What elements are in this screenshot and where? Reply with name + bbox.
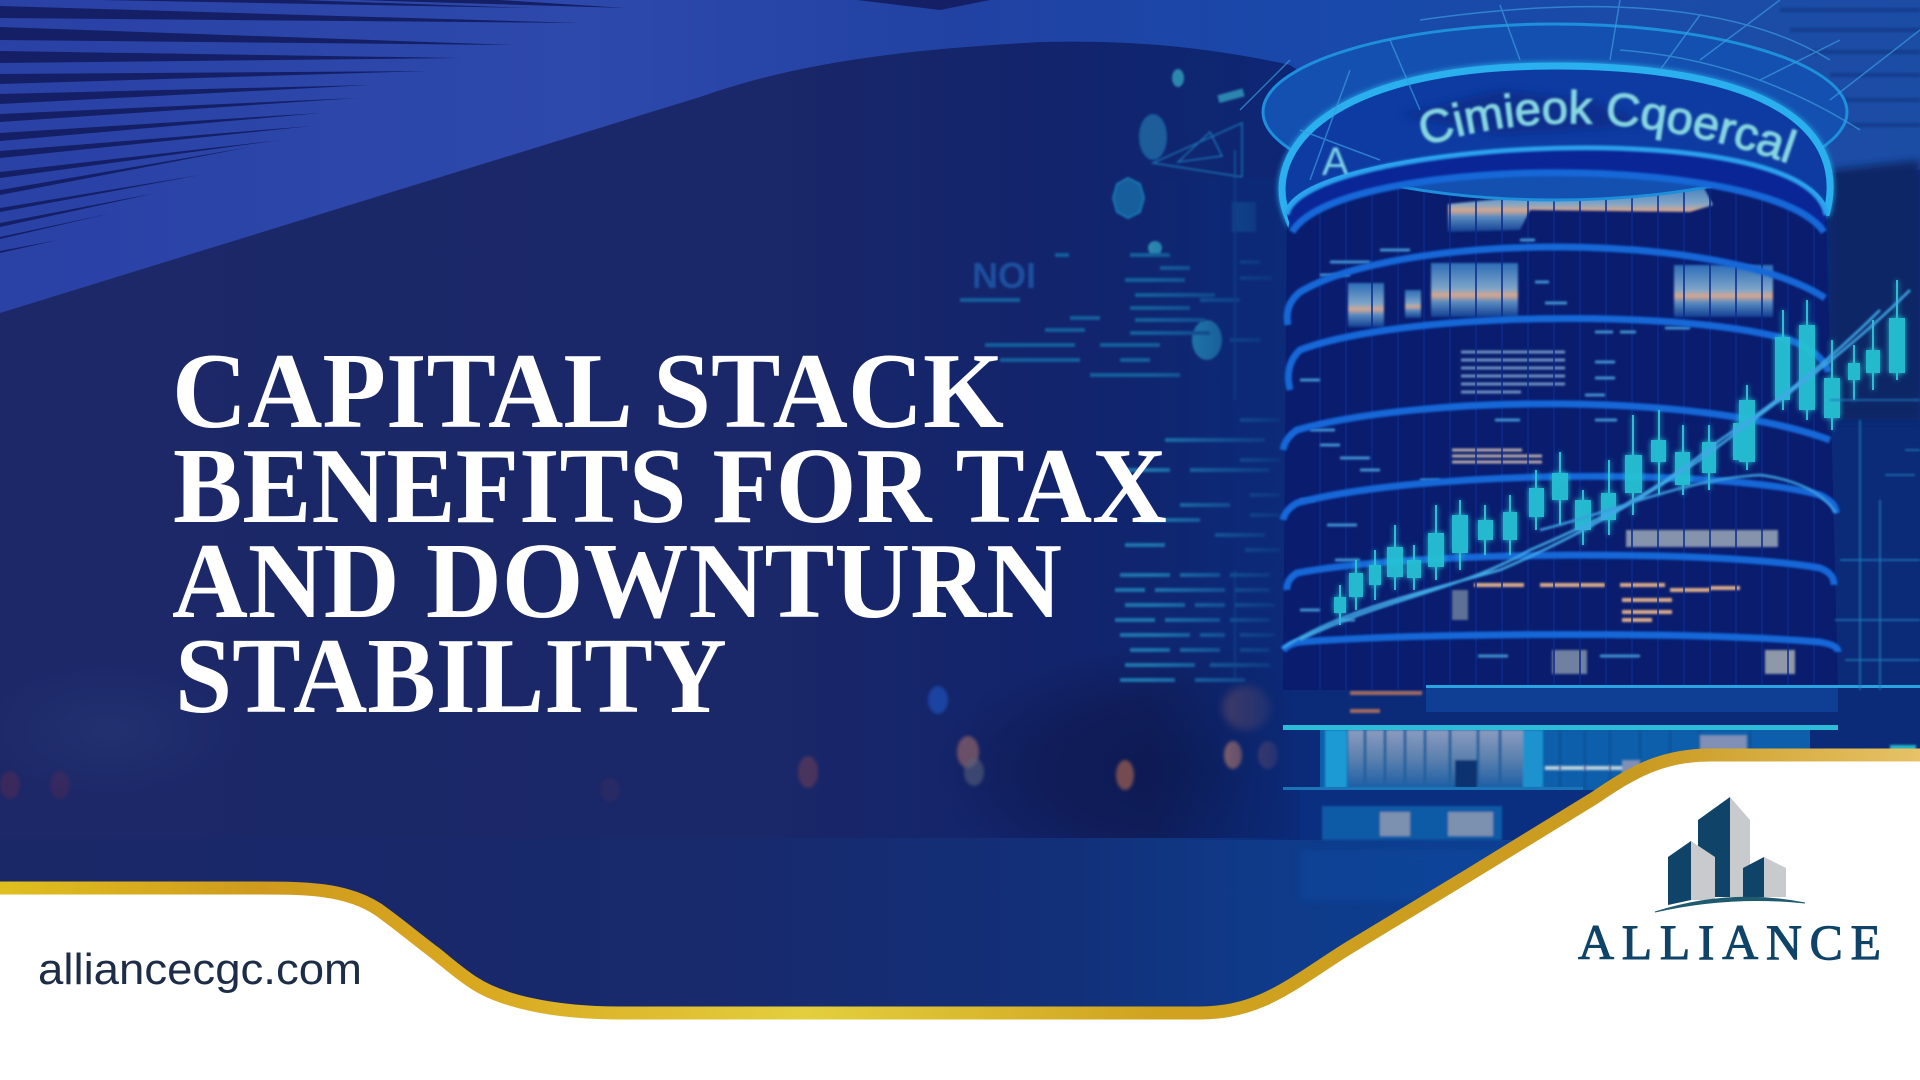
tower: rooftop logo glyph: A	[1322, 140, 1349, 184]
tower: roof halo rings	[1263, 24, 1847, 200]
tower: glowing sign text: Cimieok Cqoercal	[1418, 88, 1798, 164]
chart: candle bodies	[1334, 318, 1905, 613]
tower: floor rings	[1283, 148, 1838, 652]
title: BENEFITS FOR TAX	[173, 427, 1167, 546]
panel: data grid right of the tower	[1830, 400, 1920, 755]
background: light blue diagonal wedge with fan stripes	[0, 0, 1920, 313]
title: AND DOWNTURN	[172, 522, 1062, 641]
title	[172, 332, 1167, 736]
title: CAPITAL STACK	[172, 332, 1004, 451]
tower: reflection below the base	[1300, 850, 1560, 900]
tower: dark silhouette inside the roof	[1400, 90, 1650, 135]
NOI hologram text: NOI	[972, 255, 1036, 296]
tower: small lit dashes	[1300, 240, 1690, 656]
tower: thin network lines over the roof	[1240, 0, 1920, 180]
icon: triangular network panel	[1153, 123, 1242, 177]
tower: lit windows	[1348, 178, 1795, 711]
background: water band at the bottom	[0, 838, 1920, 1080]
tower: dark rim band	[1287, 148, 1826, 232]
chart: rising trend lines	[1283, 290, 1910, 648]
white footer band with gold edge	[0, 755, 1920, 1080]
logo: building icon	[1655, 797, 1805, 912]
sky texture top right	[1780, 10, 1920, 125]
chart: teal candlestick chart overlay	[1334, 280, 1905, 625]
tower: vertical mullions	[1320, 170, 1814, 690]
tower: building body	[1283, 148, 1838, 690]
illustration: glowing cylindrical office tower	[1168, 0, 1920, 898]
background: blurred city lights	[0, 640, 1490, 900]
tower: dark backdrop behind the tower	[1150, 178, 1920, 840]
icon: teal circle hologram	[1192, 320, 1222, 360]
panel: holographic data panels left of the tower	[960, 69, 1280, 680]
website url: alliancecgc.com	[38, 945, 362, 994]
logo: Alliance buildings and wordmark	[1578, 797, 1881, 970]
icon: hexagon hologram	[1113, 178, 1144, 218]
icon: ellipse hologram	[1140, 115, 1166, 159]
tower: podium band and glass base	[1426, 686, 1838, 712]
logo: wordmark: ALLIANCE	[1578, 914, 1881, 970]
chart: candle wicks	[1340, 280, 1897, 625]
title: STABILITY	[175, 617, 727, 736]
